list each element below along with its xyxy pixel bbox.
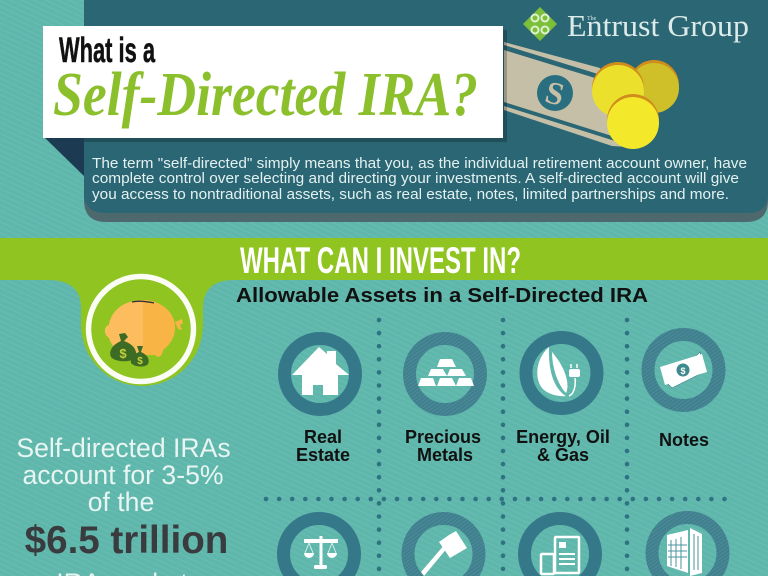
asset: precious metals: Metals xyxy=(417,445,473,465)
description text: complete control over selecting and directing your investments. A self-directed account will give xyxy=(92,171,739,187)
asset: document xyxy=(524,518,596,576)
grid dots xyxy=(266,320,728,576)
callout: market share statistic: account for 3-5% xyxy=(22,460,224,490)
logo: The Entrust Group: The xyxy=(587,16,597,22)
section banner: What can I invest in xyxy=(0,238,768,386)
subheading: allowable assets: Allowable Assets in a Self-Directed IRA xyxy=(236,284,648,307)
asset: notes xyxy=(648,334,719,450)
panel: introduction xyxy=(84,0,768,222)
asset: energy, oil and gas: & Gas xyxy=(537,445,589,465)
logo: The Entrust Group: Entrust Group xyxy=(567,8,749,43)
asset: gavel xyxy=(408,518,479,576)
title line: What is a: What is a xyxy=(59,31,155,70)
asset: precious metals: Precious xyxy=(405,427,481,447)
asset: energy, oil and gas: Energy, Oil xyxy=(516,427,610,447)
callout: market share statistic: of the xyxy=(88,487,154,517)
asset: scales of justice xyxy=(284,518,354,576)
title banner xyxy=(43,26,507,176)
icon: piggy bank with money bags: $ xyxy=(137,356,143,367)
title line: Self-Directed IRA?: Self-Directed IRA? xyxy=(53,61,478,129)
icon: piggy bank with money bags xyxy=(88,276,194,382)
asset: energy, oil and gas xyxy=(516,338,610,465)
description text: you access to nontraditional assets, such as real estate, notes, limited partnerships and more. xyxy=(92,187,729,203)
callout: market share statistic: $6.5 trillion xyxy=(25,519,228,562)
asset: notes: Notes xyxy=(659,430,709,450)
asset: notes: $ xyxy=(680,366,686,376)
icon: dollar bill and coins: S xyxy=(542,73,568,113)
callout: market share statistic: Self-directed IRAs xyxy=(16,433,231,463)
description text xyxy=(92,156,747,203)
asset: buildings xyxy=(652,518,723,576)
icon: dollar bill and coins xyxy=(504,42,679,149)
callout: market share statistic xyxy=(16,433,231,576)
heading: WHAT CAN I INVEST IN? xyxy=(240,240,521,281)
asset: precious metals xyxy=(405,338,481,465)
asset: real estate: Real xyxy=(304,427,342,447)
asset: real estate xyxy=(284,338,356,465)
description text: The term "self-directed" simply means that you, as the individual retirement account owner, have xyxy=(92,156,747,172)
icon: piggy bank with money bags: $ xyxy=(119,346,127,361)
asset: real estate: Estate xyxy=(296,445,350,465)
